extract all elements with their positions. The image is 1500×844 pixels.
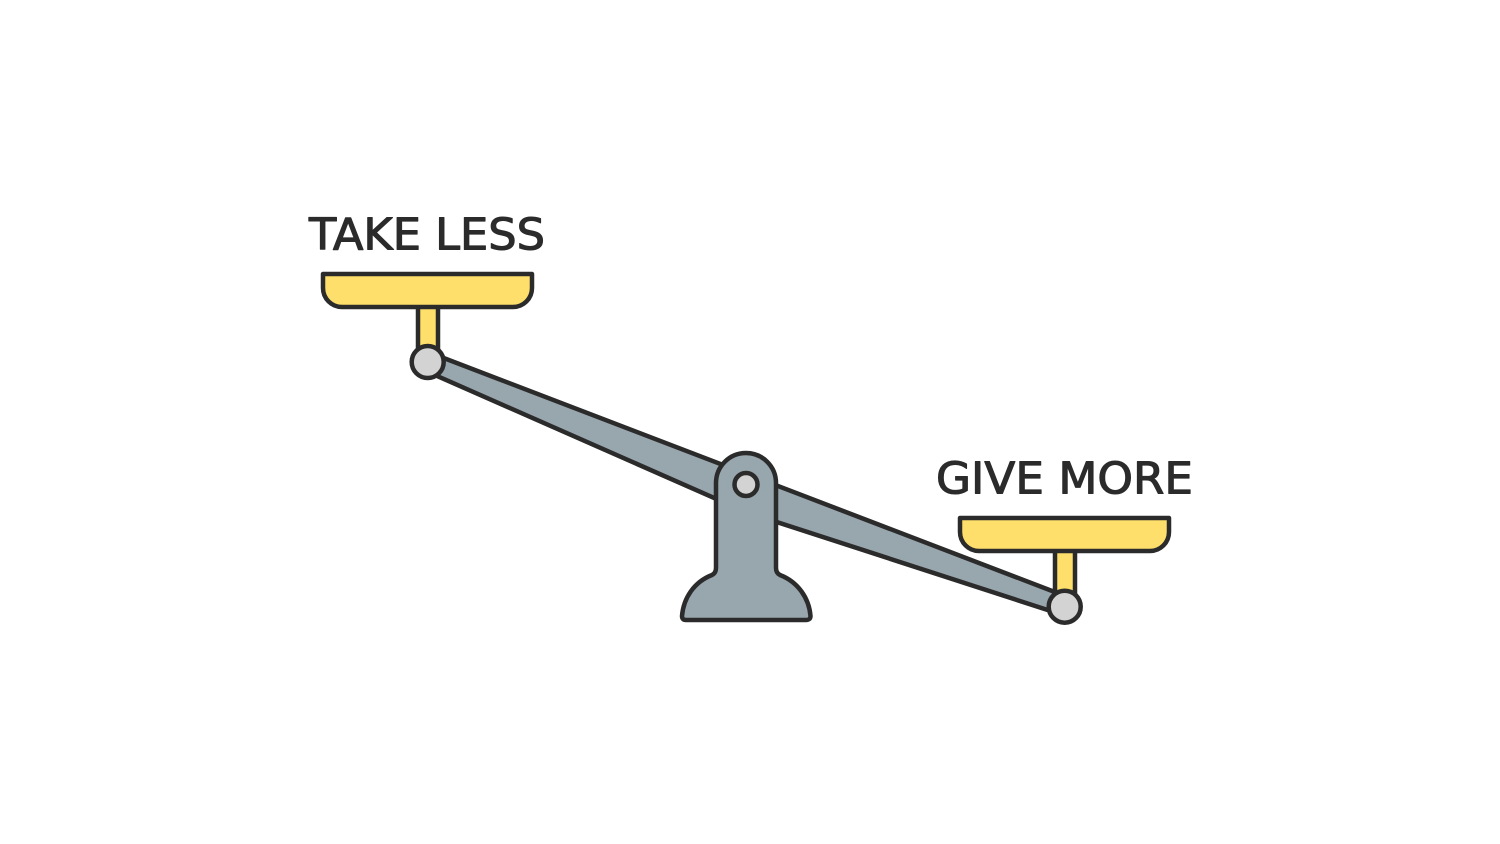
tilted beam [428, 352, 1060, 614]
label: give more: GIVE MORE [936, 454, 1193, 504]
label: take less: TAKE LESS [308, 210, 545, 260]
left yellow tray [323, 274, 532, 307]
right pivot joint [1049, 591, 1081, 623]
right yellow tray [960, 518, 1169, 551]
central fulcrum stand [682, 453, 810, 620]
fulcrum centre pin [734, 473, 758, 496]
left pivot joint [412, 346, 444, 378]
left tray support stem [418, 300, 438, 360]
right tray support stem [1055, 544, 1075, 604]
